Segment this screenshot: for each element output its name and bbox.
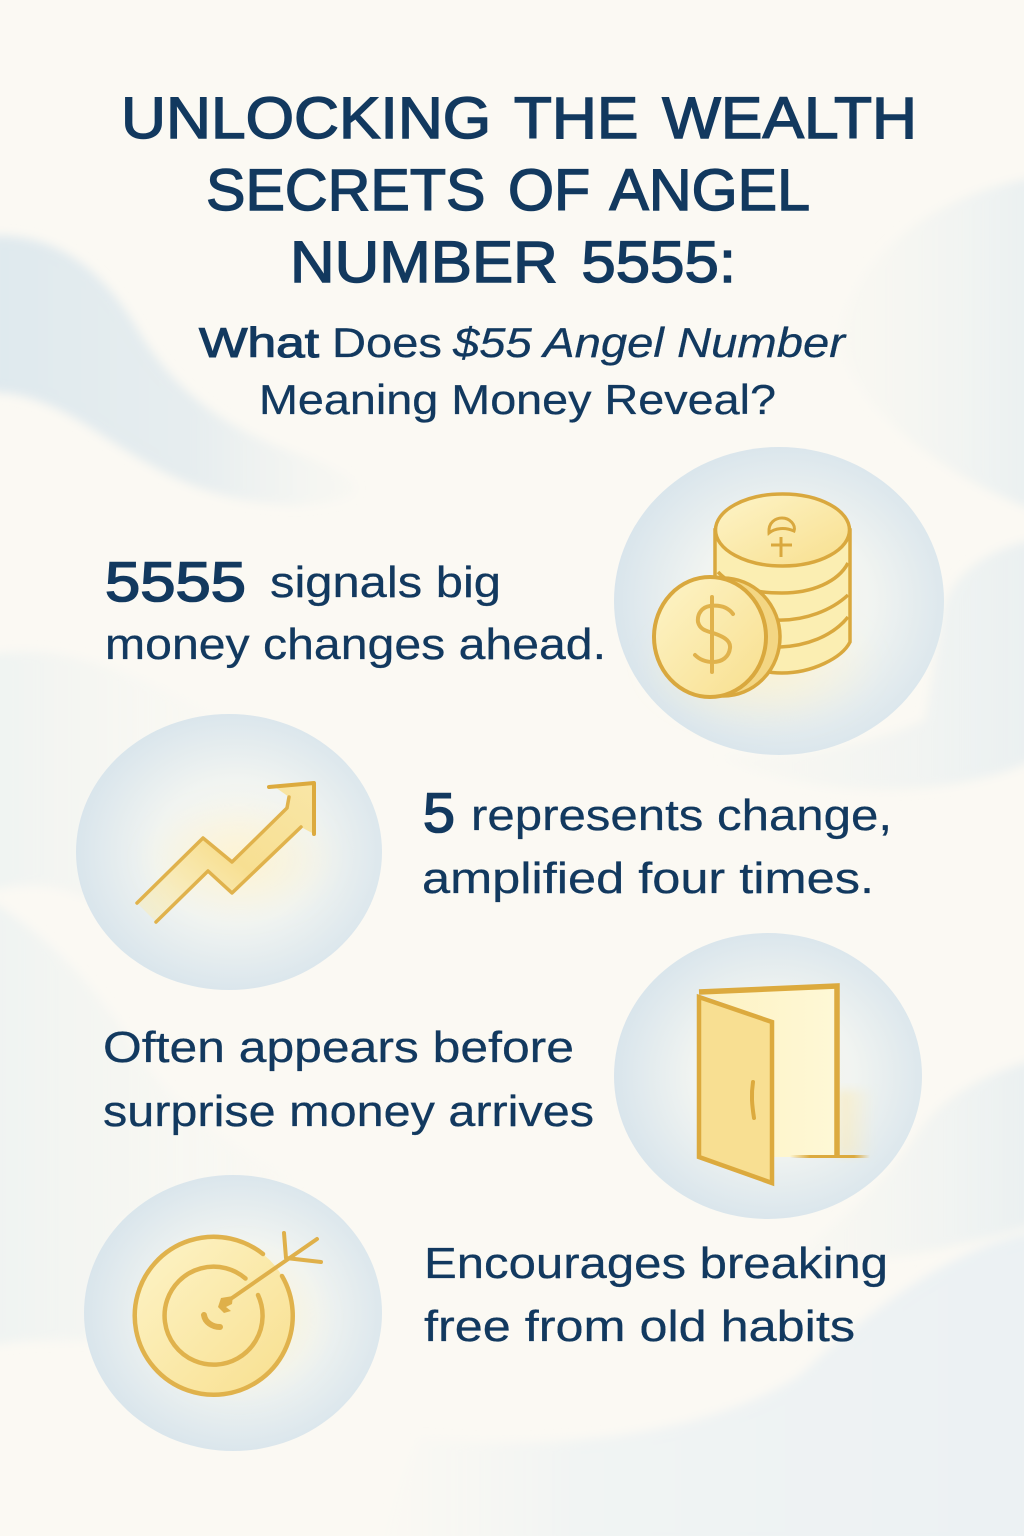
title: NUMBER 5555:: [290, 230, 736, 295]
text: 5 represents change, amplified four times: amplified four times.: [422, 854, 874, 903]
text: encourages breaking free from old habits: free from old habits: [424, 1302, 855, 1351]
panel: door row: [103, 933, 922, 1219]
icon: open door in circle: [614, 933, 922, 1219]
text: 5555 signals big money changes ahead: signals big: [270, 558, 501, 607]
text: often appears before surprise money arrives: Often appears before: [103, 1023, 574, 1072]
title: UNLOCKING THE WEALTH: [121, 86, 917, 151]
subtitle: [199, 319, 847, 423]
text: 5 represents change, amplified four times: [422, 781, 892, 903]
text: 5555 signals big money changes ahead: money changes ahead.: [105, 620, 606, 669]
icon: rising arrow in circle: [76, 714, 382, 990]
text: often appears before surprise money arrives: surprise money arrives: [103, 1087, 594, 1136]
icon: stacked coins in circle: [614, 447, 944, 755]
subtitle: Does: [332, 319, 442, 366]
title: [121, 86, 917, 295]
panel: arrow row: [76, 714, 892, 990]
title: SECRETS OF ANGEL: [206, 158, 810, 223]
text: 5 represents change, amplified four times: represents change,: [471, 791, 892, 840]
text: encourages breaking free from old habits: Encourages breaking: [424, 1239, 888, 1288]
subtitle: What: [199, 319, 319, 366]
icon: target with arrow in circle: [84, 1175, 382, 1451]
panel: coins row: [105, 447, 944, 755]
text: 5 represents change, amplified four times: 5: [423, 781, 455, 844]
text: 5555 signals big money changes ahead: 5555: [105, 550, 246, 613]
text: 5555 signals big money changes ahead: [105, 550, 606, 669]
panel: target row: [84, 1175, 888, 1451]
text: often appears before surprise money arrives: [103, 1023, 594, 1136]
subtitle: Meaning Money Reveal?: [259, 376, 776, 423]
text: encourages breaking free from old habits: [424, 1239, 888, 1351]
subtitle: $55 Angel Number: [452, 319, 847, 366]
